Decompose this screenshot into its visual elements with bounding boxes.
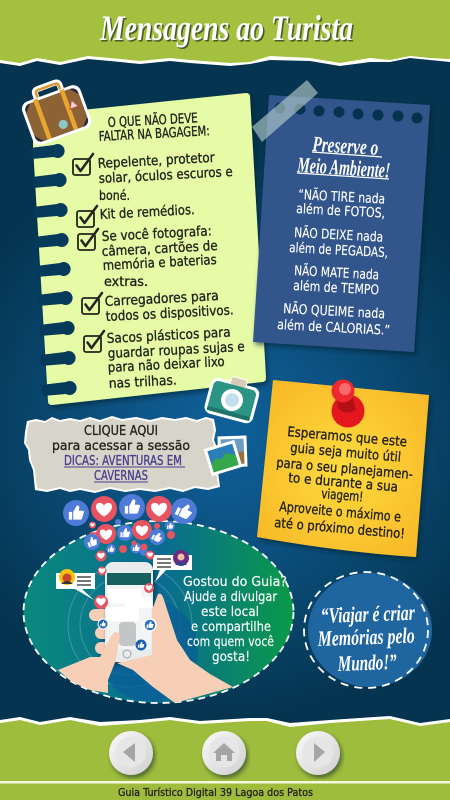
checklist items: Repelente, protetor [97, 150, 215, 172]
checklist items [97, 150, 245, 392]
checklist items: Kit de remédios. [99, 202, 195, 223]
checklist items: Carregadores para [104, 288, 219, 310]
sticky note text: para o seu planejamen- [276, 455, 414, 483]
right hand [117, 594, 233, 703]
checklist items: todos os dispositivos. [105, 302, 234, 325]
panel: checklist note [30, 93, 266, 405]
nav button: home [202, 731, 246, 775]
share text: com quem você [187, 634, 274, 650]
checklist items: boné. [99, 188, 130, 204]
checklist items: guardar roupas sujas e [107, 339, 245, 362]
click here text: CAVERNAS [94, 468, 148, 484]
click here text: CLIQUE AQUI [84, 423, 158, 439]
note holes [274, 102, 422, 124]
check boxes [73, 154, 104, 352]
phone [105, 562, 153, 662]
sticky note text: to e durante a sua [288, 470, 399, 496]
preserve quote [277, 186, 390, 339]
panel: click here label [24, 416, 220, 493]
checklist items: extras. [104, 274, 148, 290]
footer text: Guia Turístico Digital 39 Lagoa dos Patos [118, 786, 313, 799]
checklist items: para não deixar lixo [107, 354, 225, 376]
panel: yellow sticky note [257, 380, 429, 557]
tape [252, 80, 318, 142]
preserve quote: além de FOTOS, [296, 201, 386, 222]
preserve quote: além de PEGADAS, [289, 240, 388, 261]
header band [0, 0, 450, 66]
share text: Gostou do Guia? [183, 574, 287, 590]
preserve quote: além de CALORIAS.” [277, 317, 390, 339]
checklist items: memória e baterias [102, 252, 217, 274]
reaction icons [63, 494, 197, 650]
icon: red pin [332, 380, 364, 428]
preserve quote: além de TEMPO [293, 278, 380, 298]
share text [183, 574, 287, 665]
click here text [52, 423, 190, 484]
checklist items: nas trilhas. [108, 372, 177, 392]
preserve heading: Preserve o [311, 131, 379, 160]
footer band [0, 716, 450, 800]
share text: gosta! [212, 649, 250, 665]
icon: camera [203, 371, 262, 425]
sticky note text: até o próximo destino! [274, 515, 406, 542]
share text: Ajude a divulgar [184, 589, 277, 605]
chat bubble left [56, 569, 95, 600]
preserve quote: NÃO MATE nada [294, 262, 380, 283]
preserve quote: “NÃO TIRE nada [298, 186, 386, 208]
sticky note text: Aproveite o máximo e [279, 499, 402, 526]
binder holes [30, 144, 77, 396]
hand fingers behind phone [89, 609, 115, 654]
panel: quote circle [304, 572, 432, 688]
nav button: back [109, 731, 153, 775]
preserve heading: Meio Ambiente! [296, 152, 391, 183]
chat bubble right [153, 550, 192, 582]
left hand with pointing finger [58, 632, 120, 693]
phone rings [68, 563, 192, 687]
title: Mensagens ao Turista [101, 10, 355, 50]
blue glow behind phone [98, 599, 198, 701]
share text: e compartilhe [191, 619, 271, 635]
icon: photos [204, 435, 248, 476]
checklist heading [98, 109, 210, 145]
preserve quote: NÃO QUEIME nada [283, 300, 386, 322]
checklist items: Se você fotografa: [101, 223, 212, 245]
panel: preserve note [252, 80, 430, 352]
share text: este local [201, 604, 259, 620]
quote text: Mundo!” [337, 649, 397, 676]
nav button: forward [296, 731, 340, 775]
checklist items: solar, óculos escuros e [98, 164, 233, 187]
sticky note text: viagem! [321, 486, 364, 506]
panel: share oval [24, 494, 294, 703]
click here text: DICAS: AVENTURAS EM [64, 453, 182, 469]
sticky note text: guia seja muito útil [290, 440, 402, 466]
quote text [317, 600, 415, 676]
checklist heading: FALTAR NA BAGAGEM: [98, 123, 210, 145]
sticky note text [274, 424, 414, 542]
checklist items: câmera, cartões de [101, 238, 218, 260]
preserve heading [296, 131, 391, 183]
quote text: “Viajar é criar [320, 600, 415, 628]
click here text: para acessar a sessão [52, 438, 190, 454]
quote text: Memórias pelo [317, 623, 415, 651]
title: Mensagens ao Turista [99, 8, 353, 48]
checklist items: Sacos plásticos para [106, 325, 231, 347]
icon: suitcase [17, 75, 94, 147]
sticky note text: Esperamos que este [287, 424, 408, 450]
preserve quote: NÃO DEIXE nada [294, 224, 384, 246]
checklist heading: O QUE NÃO DEVE [107, 109, 198, 131]
